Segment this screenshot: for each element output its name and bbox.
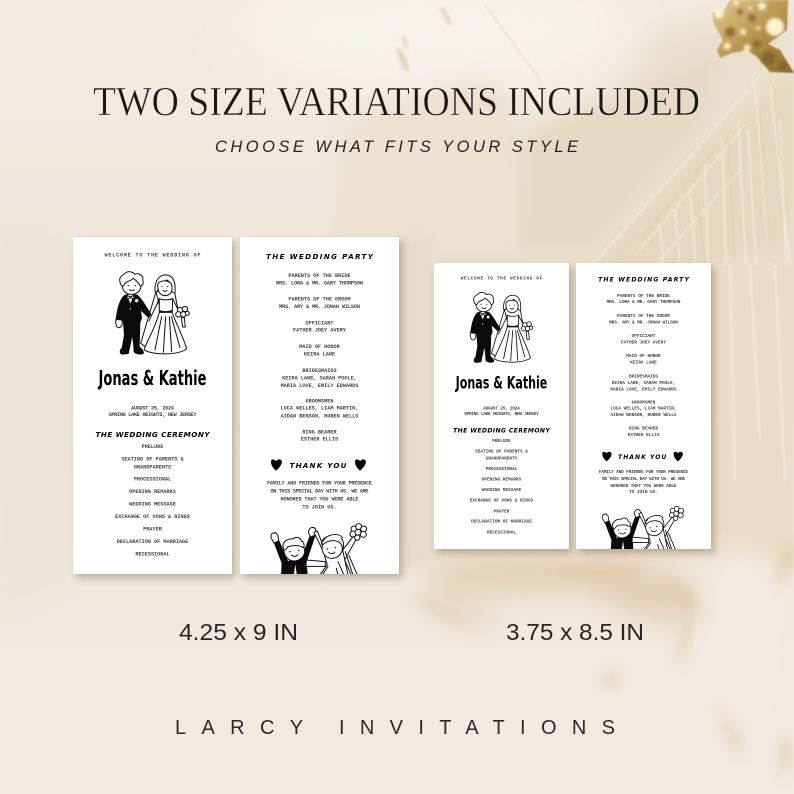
welcome line: WELCOME TO THE WEDDING OF: [104, 252, 200, 258]
wedding party list: KEIRA LANE: [304, 351, 335, 357]
ceremony order list: SEATING OF PARENTS &: [121, 456, 185, 462]
icon: heart left: [271, 460, 281, 470]
ceremony heading: THE WEDDING CEREMONY: [96, 430, 210, 439]
wedding party list: KEIRA LANE, SARAH POOLE,: [612, 380, 675, 386]
thank you message: FAMILY AND FRIENDS FOR YOUR PRESENCE: [267, 481, 372, 487]
gold leaf accent: [712, 0, 794, 73]
thank you message: HONORED THAT YOU WERE ABLE: [280, 497, 358, 503]
ceremony order list: PRELUDE: [142, 444, 163, 450]
party heading: THE WEDDING PARTY: [266, 252, 374, 261]
ceremony order list: PROCESSIONAL: [486, 466, 518, 472]
ceremony order list: RECESSIONAL: [135, 552, 170, 558]
wedding party list: [607, 293, 681, 438]
ceremony order list: PRELUDE: [492, 438, 511, 444]
ceremony order list: GRANDPARENTS: [486, 455, 518, 461]
wedding party list: ESTHER ELLIS: [628, 432, 660, 438]
ceremony order list: WEDDING MESSAGE: [482, 487, 522, 493]
party heading: THE WEDDING PARTY: [598, 277, 689, 284]
wedding party list: KEIRA LANE, SARAH POOLE,: [282, 375, 357, 381]
thank you message: FAMILY AND FRIENDS FOR YOUR PRESENCE: [599, 469, 688, 475]
wedding party list: GROOMSMEN: [632, 400, 656, 406]
thank you heading: THANK YOU: [290, 461, 347, 470]
brand name: LARCY INVITATIONS: [175, 717, 615, 739]
subtitle: CHOOSE WHAT FITS YOUR STYLE: [215, 138, 579, 156]
icon: heart left: [603, 452, 611, 461]
wedding party list: PARENTS OF THE BRIDE: [617, 293, 670, 299]
ceremony order list: DECLARATION OF MARRIAGE: [117, 539, 188, 545]
wedding party list: MRS. LORA & MR. GARY THOMPSON: [607, 299, 681, 305]
ceremony order list: EXCHANGE OF VOWS & RINGS: [115, 514, 190, 520]
wedding party list: MARIA LOVE, EMILY EDWARDS: [281, 383, 358, 389]
wedding party list: MAID OF HONOR: [299, 344, 341, 350]
wedding party list: BRIDESMAIDS: [629, 374, 658, 380]
thank you heading: THANK YOU: [618, 454, 666, 461]
illustration: couple standing: [116, 272, 189, 354]
wedding party list: BRIDESMAIDS: [302, 368, 337, 374]
ceremony order list: RECESSIONAL: [487, 529, 516, 535]
date and place: [108, 406, 197, 418]
wedding party list: AIDAN BENSON, RUBEN WELLS: [281, 413, 358, 419]
ceremony order list: WEDDING MESSAGE: [129, 502, 176, 508]
wedding party list: PARENTS OF THE BRIDE: [288, 273, 351, 279]
ceremony order list: SEATING OF PARENTS &: [475, 449, 528, 455]
illustration: couple celebrating: [271, 524, 367, 575]
wedding party list: RING BEARER: [302, 429, 338, 435]
wedding party list: AIDAN BENSON, RUBEN WELLS: [610, 412, 677, 418]
wedding party list: OFFICIANT: [632, 333, 656, 339]
ceremony order list: GRANDPARENTS: [134, 464, 171, 470]
icon: heart right: [674, 452, 682, 461]
size label: small: 3.75 x 8.5 IN: [506, 619, 644, 645]
thank you message: ON THIS SPECIAL DAY WITH US. WE ARE: [602, 476, 685, 482]
wedding party list: KEIRA LANE: [630, 359, 657, 365]
panel: large size, front card: [73, 237, 232, 574]
size label: large: 4.25 x 9 IN: [179, 619, 298, 645]
welcome line: WELCOME TO THE WEDDING OF: [461, 276, 543, 282]
ceremony heading: THE WEDDING CEREMONY: [453, 428, 550, 435]
date and place: SPRING LAKE HEIGHTS, NEW JERSEY: [108, 412, 197, 418]
wedding party list: PARENTS OF THE GROOM: [288, 297, 351, 303]
thank you message: HONORED THAT YOU WERE ABLE: [610, 483, 677, 489]
ceremony order list: OPENING REMARKS: [129, 489, 176, 495]
wedding party list: FATHER JOEY AVERY: [621, 339, 666, 345]
illustration: couple celebrating: [602, 506, 684, 550]
icon: heart right: [355, 460, 365, 470]
ceremony order list: [470, 438, 534, 535]
ceremony order list: OPENING REMARKS: [482, 476, 522, 482]
wedding party list: LUCA WELLES, LIAM MARTIN,: [610, 406, 677, 412]
wedding party list: ESTHER ELLIS: [301, 437, 338, 443]
panel: large size, back card: [240, 237, 399, 574]
ceremony order list: PROCESSIONAL: [134, 477, 171, 483]
date and place: AUGUST 25, 2024: [483, 405, 520, 411]
panel: small size, front card: [434, 263, 569, 549]
thank you message: TO JOIN US.: [302, 504, 337, 510]
thank you message: [267, 481, 372, 510]
ceremony order list: EXCHANGE OF VOWS & RINGS: [470, 497, 534, 503]
wedding party list: PARENTS OF THE GROOM: [617, 313, 670, 319]
date and place: AUGUST 25, 2024: [131, 406, 174, 412]
wedding party list: GROOMSMEN: [305, 399, 334, 405]
panel: small size, back card: [576, 263, 711, 549]
wedding party list: LUCA WELLES, LIAM MARTIN,: [281, 406, 358, 412]
wedding party list: MRS. LORA & MR. GARY THOMPSON: [276, 280, 363, 286]
wedding party list: MARIA LOVE, EMILY EDWARDS: [610, 386, 677, 392]
wedding party list: FATHER JOEY AVERY: [293, 328, 347, 334]
wedding party list: OFFICIANT: [305, 320, 334, 326]
ceremony order list: [115, 444, 190, 558]
wedding party list: MRS. AMY & MR. JONAH WILSON: [279, 304, 360, 310]
wedding party list: RING BEARER: [629, 426, 658, 432]
date and place: [464, 405, 539, 417]
wedding party list: MRS. AMY & MR. JONAH WILSON: [609, 319, 678, 325]
ceremony order list: DECLARATION OF MARRIAGE: [471, 519, 532, 525]
wedding party list: [276, 273, 363, 443]
thank you message: TO JOIN US.: [629, 489, 658, 495]
wedding party list: MAID OF HONOR: [626, 353, 661, 359]
illustration: couple standing: [470, 292, 533, 363]
date and place: SPRING LAKE HEIGHTS, NEW JERSEY: [464, 411, 539, 417]
ceremony order list: PRAYER: [143, 527, 163, 533]
thank you message: ON THIS SPECIAL DAY WITH US. WE ARE: [270, 489, 368, 495]
ceremony order list: PRAYER: [494, 508, 510, 514]
thank you message: [599, 469, 688, 495]
